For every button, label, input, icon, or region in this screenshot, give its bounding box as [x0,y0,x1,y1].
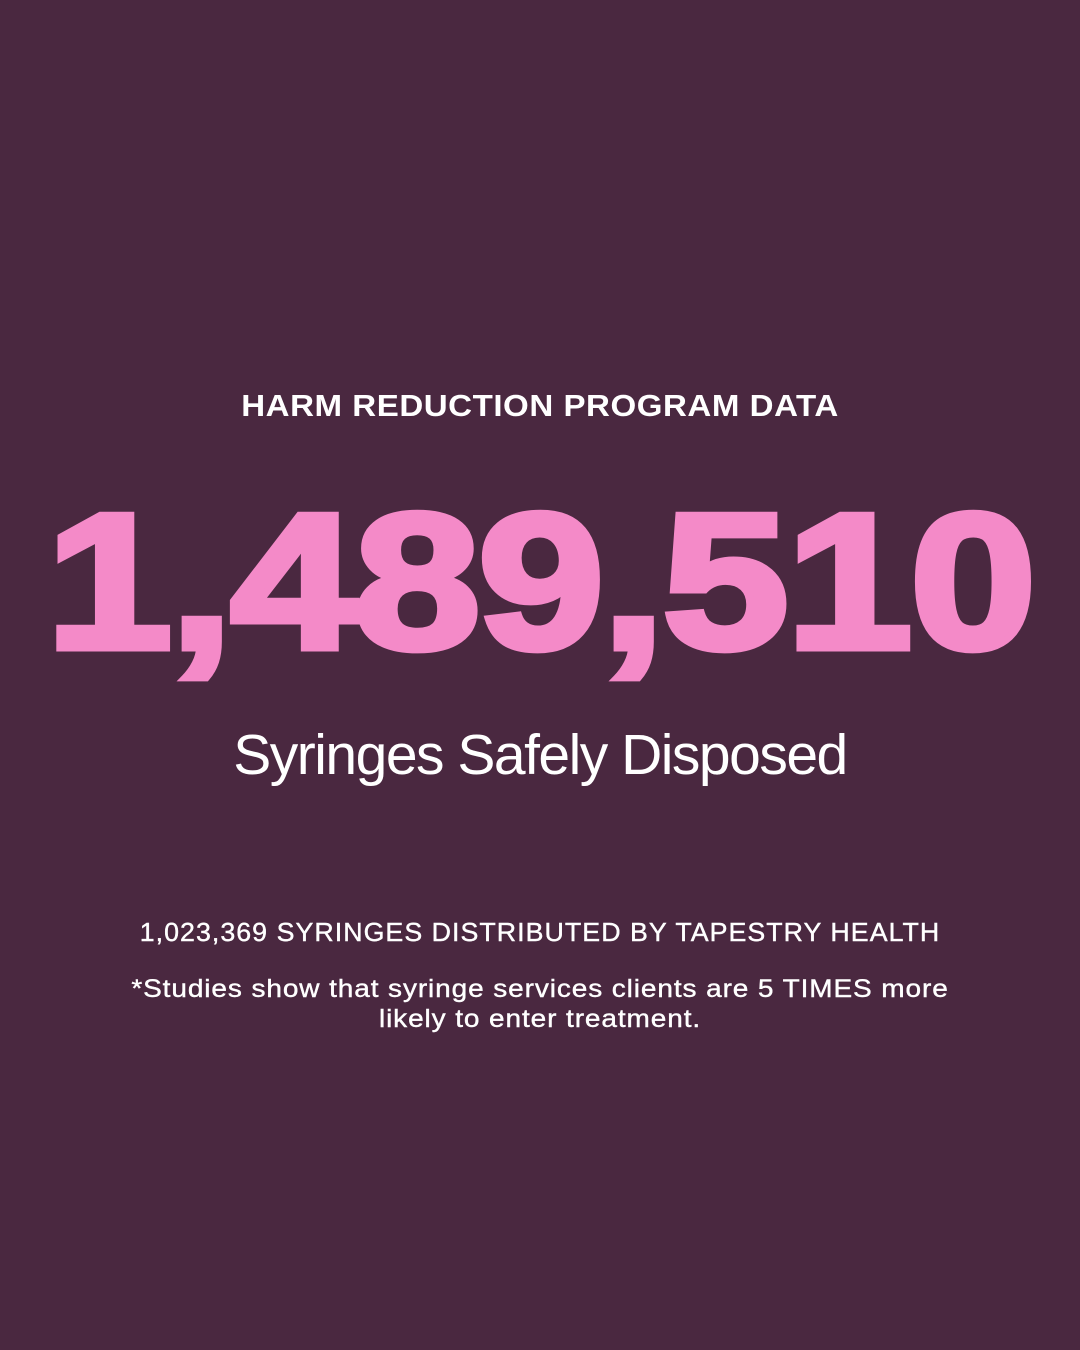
footnote [131,975,949,1033]
distributed stat: 1,023,369 SYRINGES DISTRIBUTED BY TAPESTRY HEALTH [140,917,940,947]
footnote: likely to enter treatment. [379,1005,701,1033]
subtitle: Syringes Safely Disposed [233,723,847,787]
footnote: *Studies show that syringe services clients are 5 TIMES more [131,975,949,1003]
big number: 1,489,510 [46,473,1034,689]
title: HARM REDUCTION PROGRAM DATA [241,388,839,423]
